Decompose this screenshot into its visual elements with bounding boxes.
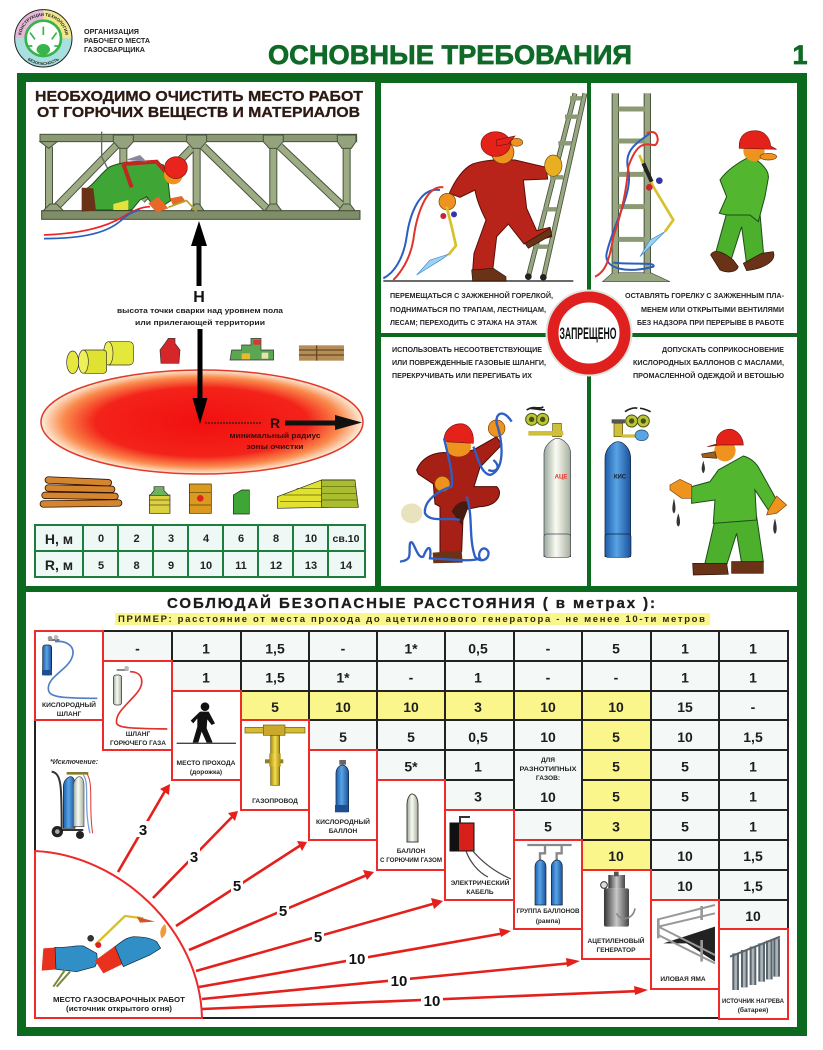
text [625,291,785,327]
distance labels: 10 [391,973,407,990]
box: heat source: (батарея) [738,1006,768,1014]
table: H and R: 0 [98,533,104,545]
box: welding place: МЕСТО ГАЗОСВАРОЧНЫХ РАБОТ [53,995,186,1004]
row 7: 10 [677,848,693,864]
distance labels: 5 [279,903,287,920]
row 1: - [614,670,619,686]
illustration: oxygen cylinder: КИС [614,475,627,481]
panel: clear the work area [26,82,375,586]
header subtitle: ОРГАНИЗАЦИЯ [84,27,139,36]
arrows: distance rays [118,784,648,1010]
distance labels: 10 [424,993,440,1010]
illustration: acetylene cylinder [526,407,571,557]
row 2 highlighted: 10 [403,699,419,715]
text: ПЕРЕКРУЧИВАТЬ ИЛИ ПЕРЕГИБАТЬ ИХ [392,371,532,380]
illustration: acetylene cylinder: АЦЕ [555,475,567,481]
panel heading: НЕОБХОДИМО ОЧИСТИТЬ МЕСТО РАБОТ [35,89,363,105]
distance labels: 3 [139,822,147,839]
row 4 [377,750,788,780]
row 7: 10 [608,848,624,864]
exception note with cart: *Исключение: [50,759,98,766]
table: H and R: R, м [45,557,73,573]
text: radius caption [230,432,321,451]
row 6: 5 [544,818,552,834]
box: sludge pit [651,900,719,989]
table: H and R [35,525,365,577]
text: МЕНЕМ ИЛИ ОТКРЫТЫМИ ВЕНТИЛЯМИ [641,305,784,314]
table: H and R: 3 [168,533,174,545]
header logo [14,9,72,68]
distance labels [137,821,443,1010]
box: fuel gas cylinder [377,780,445,870]
text: radius caption: минимальный радиус [230,432,321,440]
arrow: height H [191,221,207,306]
row 1 [172,661,788,691]
table: H and R: 6 [238,533,244,545]
text: height caption: или прилегающей территории [135,318,265,327]
row 5 [445,780,788,810]
illustration: green worker with oily hands [670,429,787,575]
text [633,345,784,380]
box: acetylene generator: АЦЕТИЛЕНОВЫЙ [588,936,645,945]
page number: 1 [792,40,808,70]
row 5: 1 [749,788,757,804]
row 6: 5 [681,818,689,834]
merged cell: different gas types: 10 [540,789,556,805]
table: H and R: 8 [273,533,279,545]
row 5: 3 [474,788,482,804]
row 2 highlighted: 15 [677,699,693,715]
row 0: - [341,640,346,656]
row 1: 1 [202,670,210,686]
section heading: СОБЛЮДАЙ БЕЗОПАСНЫЕ РАССТОЯНИЯ ( в метрах ): [167,594,655,612]
box: cylinder group: ГРУППА БАЛЛОНОВ [516,908,580,915]
box: walkway [172,691,241,780]
table: H and R: 8 [133,560,140,572]
panel heading: ОТ ГОРЮЧИХ ВЕЩЕСТВ И МАТЕРИАЛОВ [37,105,360,121]
table: H and R: 10 [305,533,317,545]
row 7: 1,5 [743,848,763,864]
illustration: ladder and torch [595,93,673,282]
box: oxygen cylinder: КИСЛОРОДНЫЙ [316,817,370,826]
row 6: 1 [749,818,757,834]
row 4: 1 [474,758,482,774]
box: electric cable: КАБЕЛЬ [466,889,494,896]
row 2 highlighted: 10 [335,699,351,715]
row 1: - [409,670,414,686]
distance table [103,631,788,929]
row 1: 1,5 [265,670,285,686]
row 0: 5 [612,640,620,656]
row 5: 5 [612,788,620,804]
text: ЛЕСАМ; ПЕРЕХОДИТЬ С ЭТАЖА НА ЭТАЖ [390,318,537,327]
box: oxygen hose: КИСЛОРОДНЫЙ [42,700,96,709]
box: cylinder group [514,840,582,929]
row 1: 1 [474,670,482,686]
text: radius caption: зоны очистки [246,444,304,451]
panel: forbidden, damaged hoses [381,337,587,586]
merged cell: different gas types [514,750,582,810]
illustration: red worker on ladder [383,93,585,281]
row 5: 5 [681,788,689,804]
row 8: 1,5 [743,878,763,894]
row 4: 5 [681,758,689,774]
row 3: 0,5 [468,729,488,745]
illustration: green worker walking away [711,131,777,272]
row 1: 1* [336,670,350,686]
example note: ПРИМЕР: расстояние от места прохода до ацетиленового генератора - не менее 10-ти метров [118,614,705,625]
panel: safe distances [26,592,797,1027]
header subtitle [84,27,150,54]
text [390,291,553,327]
illustration: truss [40,134,360,219]
table: H and R: 2 [133,533,140,545]
box: acetylene generator [582,870,651,959]
text: ПЕРЕМЕЩАТЬСЯ С ЗАЖЖЕННОЙ ГОРЕЛКОЙ, [390,291,553,300]
row 2 highlighted: - [751,699,756,715]
table: H and R: 11 [235,560,247,572]
box: welding place [35,851,202,1018]
exception note with cart [50,759,98,839]
row 6 [514,810,788,840]
arrow: radius R [205,415,362,431]
table: H and R: 13 [305,560,317,572]
distance labels: 5 [314,929,322,946]
row 0: 1 [202,640,210,656]
text: ИСПОЛЬЗОВАТЬ НЕСООТВЕТСТВУЮЩИЕ [392,345,542,354]
arrow: radius R: R [270,415,280,431]
box: electric cable: ЭЛЕКТРИЧЕСКИЙ [450,878,510,887]
hazard items top row [67,338,344,374]
row 8: 10 [677,878,693,894]
row 4: 1 [749,758,757,774]
text: ПРОМАСЛЕННОЙ ОДЕЖДОЙ И ВЕТОШЬЮ [633,371,784,380]
row 2 highlighted: 5 [271,699,279,715]
box: acetylene generator: ГЕНЕРАТОР [597,947,636,954]
box: gas pipeline [241,720,309,810]
text: КИСЛОРОДНЫХ БАЛЛОНОВ С МАСЛАМИ, [633,358,784,367]
row 6: 3 [612,818,620,834]
row 2 highlighted: 10 [608,699,624,715]
distance labels: 5 [233,878,241,895]
table: H and R: 5 [98,560,104,572]
box: oxygen cylinder: БАЛЛОН [329,828,357,835]
row 0: 1 [681,640,689,656]
illustration: oxygen cylinder [605,408,651,557]
box: fuel gas hose [103,661,172,750]
box: fuel gas cylinder: С ГОРЮЧИМ ГАЗОМ [380,857,442,864]
row 0 [103,631,788,661]
text: ПОДНИМАТЬСЯ ПО ТРАПАМ, ЛЕСТНИЦАМ, [390,305,546,314]
header logo: БЕЗОПАСНОСТЬ [28,58,59,65]
title: ОСНОВНЫЕ ТРЕБОВАНИЯ [268,40,632,70]
row 0: 0,5 [468,640,488,656]
panel: forbidden, leaving lit torch [591,83,797,333]
text: БЕЗ НАДЗОРА ПРИ ПЕРЕРЫВЕ В РАБОТЕ [637,318,784,327]
table: H and R: 4 [203,533,210,545]
box: cylinder group: (рампа) [536,918,560,925]
panel: forbidden, oil contact [591,337,797,586]
row 3: 1,5 [743,729,763,745]
row 7 [582,840,788,870]
sign: forbidden: ЗАПРЕЩЕНО [560,324,616,343]
table: H and R: 10 [200,560,212,572]
danger zone ellipse [41,370,363,474]
merged cell: different gas types: ГАЗОВ: [536,775,560,782]
distance labels: 10 [349,951,365,968]
box: oxygen cylinder [309,750,377,840]
box: electric cable [445,810,514,900]
row 1: - [546,670,551,686]
row 3: 10 [677,729,693,745]
row 4: 5* [404,758,418,774]
table: H and R: H, м [45,531,73,547]
box: walkway: (дорожка) [190,769,222,776]
row 8 [651,870,788,900]
text: height caption [117,306,284,327]
row 1: 1 [681,670,689,686]
text: ИЛИ ПОВРЕЖДЕННЫЕ ГАЗОВЫЕ ШЛАНГИ, [392,358,546,367]
illustration: welder on truss [44,132,197,239]
row 2 highlighted: 3 [474,699,482,715]
row 9: 10 [745,908,761,924]
box: fuel gas hose: ШЛАНГ [126,731,151,738]
sign: forbidden [546,290,632,376]
row 9 [719,900,788,929]
text [392,345,546,380]
table: H and R: 14 [340,560,353,572]
row 3: 5 [407,729,415,745]
panel heading [35,89,363,121]
header subtitle: РАБОЧЕГО МЕСТА [84,36,150,45]
row 0: - [135,640,140,656]
outline of lower area [35,720,719,1018]
box: oxygen hose [35,631,103,720]
illustration: red worker tangled in hose [400,414,512,563]
header subtitle: ГАЗОСВАРЩИКА [84,45,145,54]
box: fuel gas cylinder: БАЛЛОН [397,848,425,855]
box: heat source: ИСТОЧНИК НАГРЕВА [722,998,784,1005]
row 3: 10 [540,729,556,745]
arrow: height H: H [193,289,205,306]
hazard items bottom row [43,480,358,514]
box: welding place: (источник открытого огня) [66,1006,172,1013]
box: fuel gas hose: ГОРЮЧЕГО ГАЗА [110,740,166,747]
merged cell: different gas types: ДЛЯ [541,757,555,764]
distance labels: 3 [190,849,198,866]
merged cell: different gas types: РАЗНОТИПНЫХ [520,766,577,773]
row 0: 1 [749,640,757,656]
row 3 [309,720,788,750]
panel: forbidden, climbing with lit torch [381,83,587,333]
row 0: 1* [404,640,418,656]
row 3: 5 [339,729,347,745]
table: H and R: 12 [270,560,282,572]
row 2 highlighted [241,691,788,720]
text: height caption: высота точки сварки над уровнем пола [117,306,284,315]
row 4: 5 [612,758,620,774]
table: H and R: св.10 [333,533,360,545]
row 0: 1,5 [265,640,285,656]
row 3: 5 [612,729,620,745]
box: gas pipeline: ГАЗОПРОВОД [252,798,298,805]
box: oxygen hose: ШЛАНГ [57,711,82,718]
text: ДОПУСКАТЬ СОПРИКОСНОВЕНИЕ [662,345,784,354]
table: H and R: 9 [168,560,174,572]
box: sludge pit: ИЛОВАЯ ЯМА [660,976,706,983]
box: walkway: МЕСТО ПРОХОДА [176,760,236,767]
text: ОСТАВЛЯТЬ ГОРЕЛКУ С ЗАЖЖЕННЫМ ПЛА- [625,291,785,300]
box: heat source [719,929,788,1019]
row 2 highlighted: 10 [540,699,556,715]
header logo: КОНСТРУКЦИИ ТЕХНОЛОГИИ [18,13,68,35]
arrow: down to centre [192,329,208,424]
row 1: 1 [749,670,757,686]
row 0: - [546,640,551,656]
